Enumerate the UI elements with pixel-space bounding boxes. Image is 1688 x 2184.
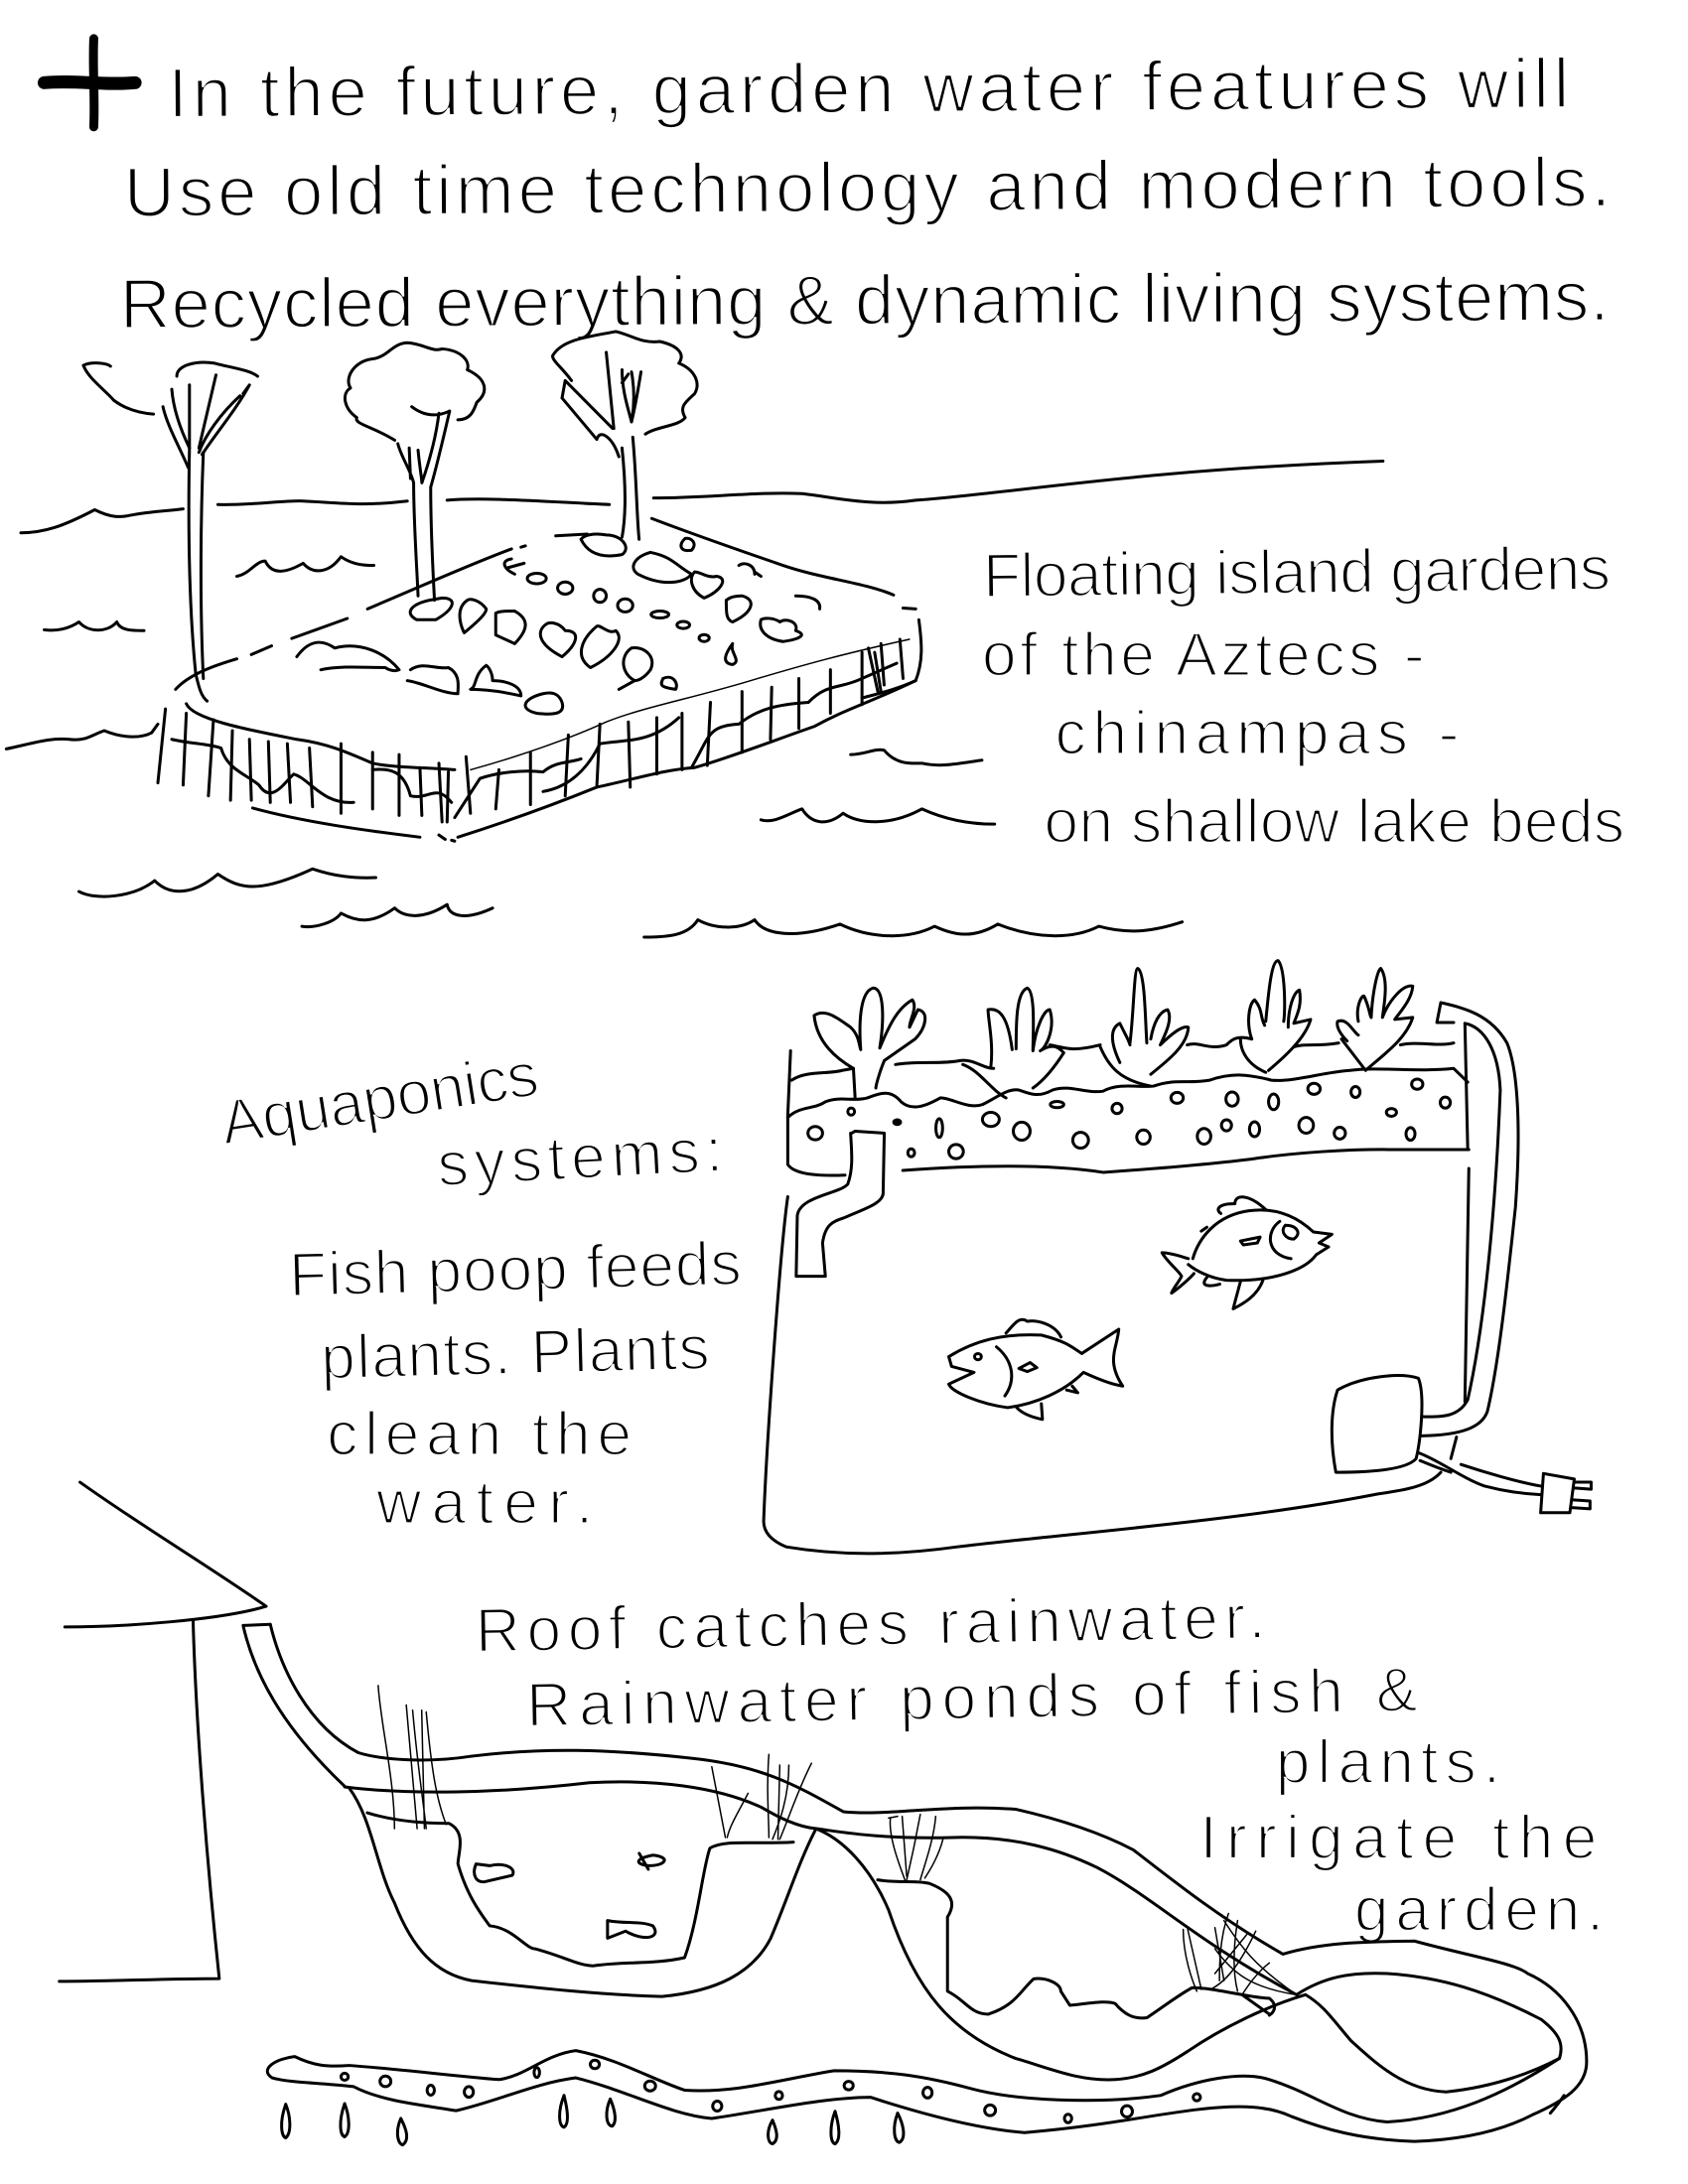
- tree: left: [83, 362, 257, 701]
- floating island caption: Floating island gardens: [983, 534, 1611, 611]
- pond one: [350, 1788, 816, 1996]
- reeds: [378, 1686, 1297, 1994]
- heading text: [120, 45, 1611, 344]
- heading text: Recycled everything & dynamic living systems.: [120, 258, 1610, 344]
- tank outline: [764, 1168, 1469, 1554]
- return pipe: [1422, 1003, 1518, 1458]
- illustration: aquaponics tank: [764, 961, 1591, 1554]
- small fish: [475, 1853, 664, 1938]
- illustration: rainwater ponds and irrigation: [243, 1624, 1587, 2145]
- pond two: [816, 1829, 1306, 2080]
- floating island caption: of the Aztecs -: [982, 620, 1425, 690]
- rainwater caption: plants.: [1276, 1727, 1500, 1797]
- rainwater caption: Roof catches rainwater.: [475, 1582, 1266, 1666]
- illustration: floating island garden: [6, 332, 1383, 937]
- drain pipe: [796, 1131, 885, 1277]
- fish: upper: [1162, 1197, 1332, 1308]
- aquaponics caption: Fish poop feeds: [288, 1229, 742, 1310]
- rainwater caption: Rainwater ponds of fish &: [526, 1655, 1418, 1740]
- icon: plus sign: [44, 39, 135, 127]
- heading text: In the future, garden water features will: [168, 45, 1570, 133]
- pump: [1332, 1376, 1422, 1472]
- island crop rows: [297, 534, 820, 714]
- aquaponics caption: plants. Plants: [320, 1313, 711, 1393]
- aquaponics caption: clean the: [327, 1399, 632, 1468]
- rainwater caption: Irrigate the: [1199, 1803, 1597, 1872]
- grow bed: [787, 1024, 1469, 1175]
- floating island caption: [982, 534, 1624, 857]
- island outline: [176, 518, 921, 841]
- floating island caption: chinampas -: [1055, 699, 1459, 768]
- heading text: Use old time technology and modern tools.: [124, 144, 1611, 232]
- fish: lower: [949, 1319, 1123, 1420]
- aquaponics caption: water.: [375, 1468, 593, 1538]
- floating island caption: on shallow lake beds: [1044, 787, 1624, 857]
- horizon line: [21, 461, 1383, 533]
- power cord and plug: [1418, 1452, 1591, 1513]
- rainwater caption: garden.: [1354, 1874, 1604, 1944]
- gravel pebbles: [808, 1079, 1451, 1159]
- aquaponics caption: [216, 1039, 742, 1538]
- island reed stakes: [158, 639, 903, 822]
- illustration: house: [60, 1482, 266, 1981]
- tree: right: [552, 332, 697, 539]
- tree: middle: [345, 342, 485, 601]
- water waves: [6, 557, 1183, 937]
- aquaponics caption: Aquaponics: [216, 1039, 543, 1159]
- plants: [814, 961, 1413, 1098]
- pipe and irrigation hose: [243, 1624, 1587, 2141]
- hose holes: [341, 2060, 1200, 2122]
- rainwater caption: [475, 1582, 1604, 1944]
- water drops: [282, 2096, 904, 2145]
- heading block: [44, 39, 1611, 344]
- aquaponics caption: systems:: [436, 1115, 725, 1199]
